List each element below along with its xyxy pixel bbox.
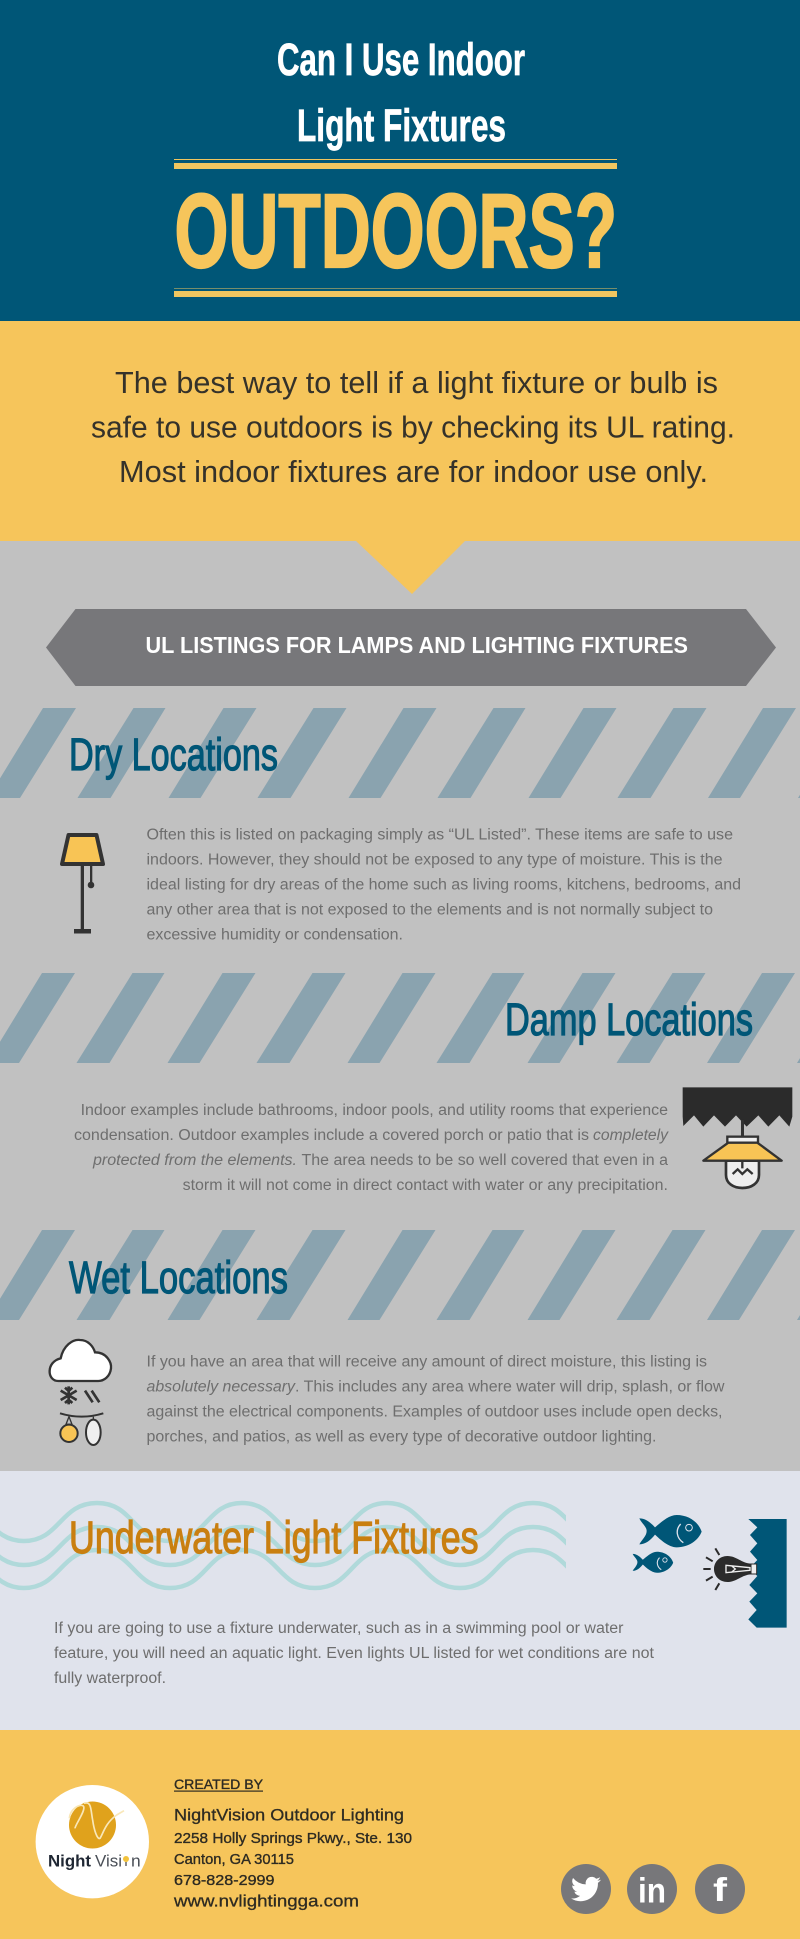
text: credits: NightVision Outdoor Lighting [174,1806,404,1825]
text: underwater light fixtures: feature, you will need an aquatic light. Even lights UL listed for wet conditions are not [54,1645,655,1662]
banner: UL listings [46,609,776,686]
text: wet locations: If you have an area that will receive any amount of direct moisture, this listing is [146,1354,707,1370]
icon: fish and underwater light [633,1515,787,1628]
icon: facebook: f [713,1871,728,1908]
text: credits: www.nvlightingga.com [173,1892,359,1911]
text: damp locations: condensation. Outdoor examples include a covered porch or patio that is [74,1127,589,1144]
text: dry locations: indoors. However, they should not be exposed to any type of moisture. This is the [146,852,722,868]
intro text [91,365,735,489]
text: credits: 678-828-2999 [174,1873,274,1889]
icon: linkedin: in [638,1872,666,1911]
heading: dry locations: Dry Locations [69,729,278,780]
text: credits [173,1776,412,1911]
text: wet locations: absolutely necessary [146,1378,296,1396]
icon: light bulb [703,1548,757,1590]
panel: intro [0,321,800,541]
title: can I use indoor light fixtures: Can I Use Indoor [277,34,525,85]
arrow: intro pointer [356,541,465,594]
text: damp locations: storm it will not come in direct contact with water or any precipitation. [183,1177,668,1194]
text: wet locations: against the electrical components. Examples of outdoor uses include open decks, [146,1404,722,1420]
text: dry locations: Often this is listed on packaging simply as “UL Listed”. These items are safe to use [146,826,733,844]
icon: pool wall [748,1519,787,1628]
heading: wet locations: Wet Locations [69,1252,288,1303]
icon: facebook [695,1864,745,1914]
text: wet locations: porches, and patios, as well as every type of decorative outdoor lighting. [146,1428,656,1446]
text: wet locations: . This includes any area where water will drip, splash, or flow [295,1378,725,1396]
panel: header [0,0,800,321]
stripes: damp locations [0,973,800,1063]
text: damp locations: protected from the elements. [92,1152,297,1169]
title: can I use indoor light fixtures [277,34,525,151]
panel: underwater light fixtures [0,1471,800,1730]
text: dry locations [146,826,741,944]
text: credits: Canton, GA 30115 [174,1852,294,1868]
text: dry locations: excessive humidity or condensation. [146,926,403,944]
text: damp locations [74,1102,669,1194]
panel: footer [0,1730,800,1939]
text: underwater light fixtures [54,1620,655,1687]
logo: NightVision: n [131,1852,141,1871]
intro text: The best way to tell if a light fixture or bulb is [115,365,718,400]
stripes: dry locations [0,708,800,798]
heading: underwater light fixtures: Underwater Light Fixtures [69,1512,478,1563]
text: underwater light fixtures: If you are going to use a fixture underwater, such as in a swimming pool or water [54,1620,624,1637]
icon: floor lamp [62,835,103,934]
waves [0,1503,606,1588]
text: dry locations: ideal listing for dry areas of the home such as living rooms, kitchens, bedrooms, and [146,876,741,894]
banner: UL listings: UL LISTINGS FOR LAMPS AND LIGHTING FIXTURES [146,632,688,658]
text: dry locations: any other area that is not exposed to the elements and is not normally subject to [146,902,713,918]
text: damp locations: Indoor examples include bathrooms, indoor pools, and utility rooms that experience [81,1102,668,1119]
logo: NightVision [36,1785,149,1898]
icon: linkedin [627,1864,677,1914]
text: credits: CREATED BY [174,1776,264,1792]
text: underwater light fixtures: fully waterproof. [54,1670,166,1687]
text: damp locations: completely [593,1127,669,1144]
intro text: Most indoor fixtures are for indoor use only. [119,454,708,489]
logo: NightVision: Visi [95,1852,122,1871]
title rule: bottom [174,288,617,297]
text: wet locations [146,1354,725,1446]
panel: UL listings background [0,541,800,1471]
title: can I use indoor light fixtures: Light Fixtures [297,100,506,151]
icon: twitter [561,1864,611,1914]
logo: NightVision: Night [48,1852,91,1871]
intro text: safe to use outdoors is by checking its UL rating. [91,410,735,444]
title rule: top [174,159,617,169]
icon: small fish [633,1552,673,1573]
icon: ceiling lamp [683,1087,792,1188]
text: credits: 2258 Holly Springs Pkwy., Ste. 130 [174,1831,412,1847]
icon: large fish [639,1515,702,1547]
icon: cloud and lights [50,1340,111,1445]
text: damp locations: The area needs to be so well covered that even in a [302,1152,668,1169]
stripes: wet locations [0,1230,800,1320]
